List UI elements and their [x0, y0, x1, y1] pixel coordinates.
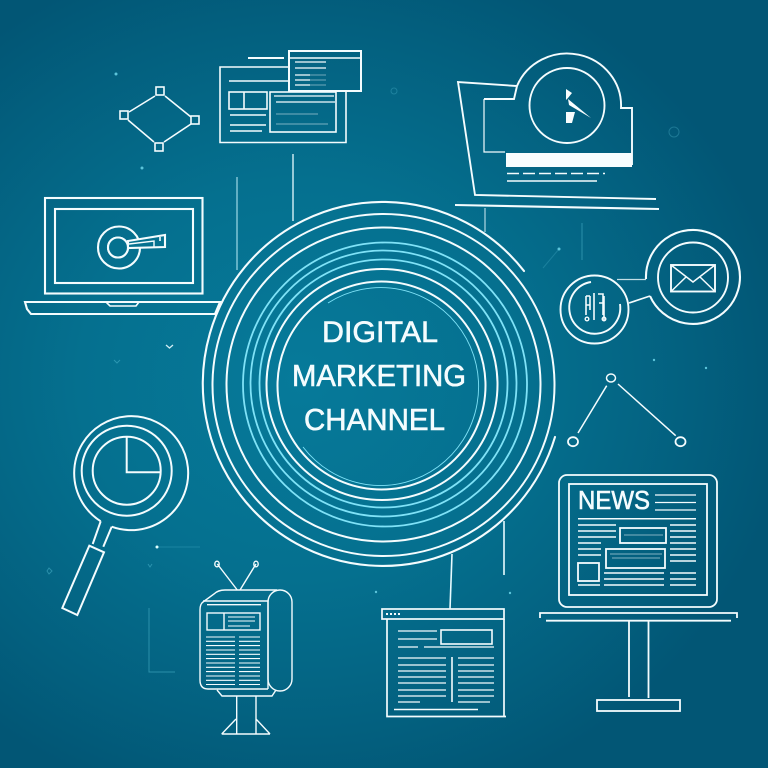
icon: email bubble [617, 230, 740, 324]
icon: vector diamond [120, 87, 199, 151]
icon: clock card [455, 53, 659, 209]
icon: tv newspaper [200, 561, 292, 734]
concentric rings [203, 202, 555, 566]
icon: overlapping web windows [220, 51, 361, 142]
connector lines [140, 154, 504, 609]
icon: laptop with key [25, 198, 220, 314]
title: CHANNEL [304, 402, 445, 437]
title: DIGITAL [322, 316, 438, 349]
icon: magnifier with pie chart [62, 416, 188, 615]
icon: network nodes [568, 374, 686, 446]
title [292, 316, 466, 437]
background accents [47, 72, 707, 672]
icon: circuit bubble [560, 276, 628, 344]
icon: news tablet on stand [540, 475, 737, 711]
icon: web page document [382, 609, 506, 716]
news label: NEWS [578, 485, 650, 515]
title: MARKETING [292, 358, 466, 393]
